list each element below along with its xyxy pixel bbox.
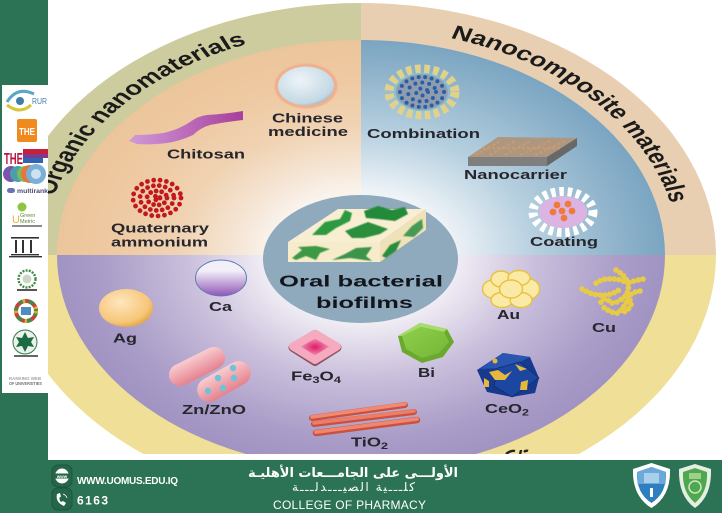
item: quaternary ammonium	[111, 180, 210, 250]
item: combination: Combination	[367, 126, 480, 141]
item: Cu	[582, 270, 644, 335]
website address: WWW.UOMUS.EDU.IQ	[77, 476, 178, 487]
footer: blue university shield	[633, 463, 670, 508]
item: Ca: Ca	[209, 299, 233, 314]
item: Fe3O4: Fe	[291, 368, 306, 384]
logo: ranking web of universities: RANKING WEB	[9, 376, 42, 381]
logo: ranking web of universities	[9, 376, 42, 386]
item: quaternary ammonium: ammonium	[111, 234, 208, 250]
item: combination	[367, 69, 480, 141]
item: Zn/ZnO: Zn/ZnO	[182, 402, 246, 417]
phone number: 6163	[77, 494, 108, 508]
item: Fe3O4: 4	[334, 375, 341, 385]
logo: SDG wheel	[16, 301, 36, 321]
logo: UI GreenMetric	[12, 202, 42, 227]
outer ring: nanocomposite band	[361, 3, 716, 255]
item: Zn/ZnO	[165, 343, 255, 417]
footer: college name: الأولـــى على الجامـــعات الأهليـة	[248, 464, 458, 481]
item: Bi: Bi	[418, 365, 435, 380]
center circle: oral bacterial biofilms	[263, 195, 458, 323]
item: coating: Coating	[530, 234, 598, 249]
item: Fe3O4: 3	[312, 375, 320, 385]
logo: arab universities wreath	[17, 270, 37, 291]
item: CeO2	[477, 353, 539, 418]
item: chinese medicine: medicine	[268, 124, 348, 139]
footer: contact block	[52, 465, 178, 510]
logo: RUR: RUR	[32, 97, 47, 106]
item: Au: Au	[497, 307, 520, 322]
item: chinese medicine	[268, 64, 348, 139]
logo: columns	[9, 237, 42, 257]
logo: THE	[17, 119, 37, 142]
footer: college name: كلـــية الصيـــدلـــة	[292, 480, 415, 494]
icon: phone	[52, 488, 72, 510]
item: Ag	[99, 289, 153, 346]
logo: THE: THE	[19, 127, 35, 138]
center circle: oral bacterial biofilms: Oral bacterial	[279, 274, 443, 290]
logos sidebar panel	[2, 85, 48, 393]
item: TiO2: 2	[381, 441, 388, 451]
logo: THE impact rankings: THE	[4, 151, 23, 168]
item: Au	[482, 270, 540, 322]
outer ring: metal band	[48, 255, 716, 454]
item: CeO2: CeO	[485, 401, 512, 416]
center circle: oral bacterial biofilms: biofilms	[316, 295, 413, 312]
icon: biofilm block	[288, 206, 426, 262]
item: quaternary ammonium: Quaternary	[111, 220, 210, 236]
quadrant: organic nanomaterials	[57, 40, 361, 255]
quadrant: nanocomposite materials	[361, 40, 665, 255]
item: chinese medicine: Chinese	[272, 110, 343, 126]
logo: multirank: multirank	[17, 188, 48, 195]
item: Cu: Cu	[592, 320, 616, 335]
icon: globe www: www	[56, 474, 68, 479]
item: Ag: Ag	[113, 330, 137, 346]
logo: UI GreenMetric: Green	[20, 213, 35, 219]
logo: UI GreenMetric: U	[12, 214, 20, 226]
item: TiO2	[312, 404, 417, 451]
item: nanocarrier: Nanocarrier	[464, 167, 567, 182]
item: Ca	[196, 260, 246, 314]
item: TiO2: TiO	[351, 434, 372, 450]
footer: college name: COLLEGE OF PHARMACY	[273, 498, 426, 512]
logo: THE impact rankings	[4, 149, 48, 168]
logo: ranking web of universities: OF UNIVERSITIES	[9, 381, 42, 386]
footer: college name	[248, 464, 458, 512]
heading: nanocomposite materials: Nanocomposite materials	[452, 26, 686, 202]
logo: multirank	[3, 164, 48, 195]
item: coating	[530, 192, 598, 249]
item: chitosan: Chitosan	[167, 146, 245, 162]
half: metal nanomaterials	[57, 255, 665, 470]
item: Bi	[398, 323, 454, 380]
logo: RUR	[7, 91, 47, 110]
item: chitosan	[129, 111, 245, 162]
item: nanocarrier	[464, 137, 577, 182]
clipped bottom band heading	[506, 450, 528, 454]
logo: UI GreenMetric: Metric	[20, 219, 35, 225]
logo: arab accreditation star	[13, 330, 38, 357]
heading: organic nanomaterials: Organic nanomaterials	[48, 36, 245, 194]
item: CeO2: 2	[522, 408, 529, 418]
item: Fe3O4	[291, 334, 341, 385]
footer: green college shield	[679, 464, 711, 508]
outer ring: organic band	[48, 3, 361, 255]
item: Fe3O4: O	[320, 368, 334, 384]
